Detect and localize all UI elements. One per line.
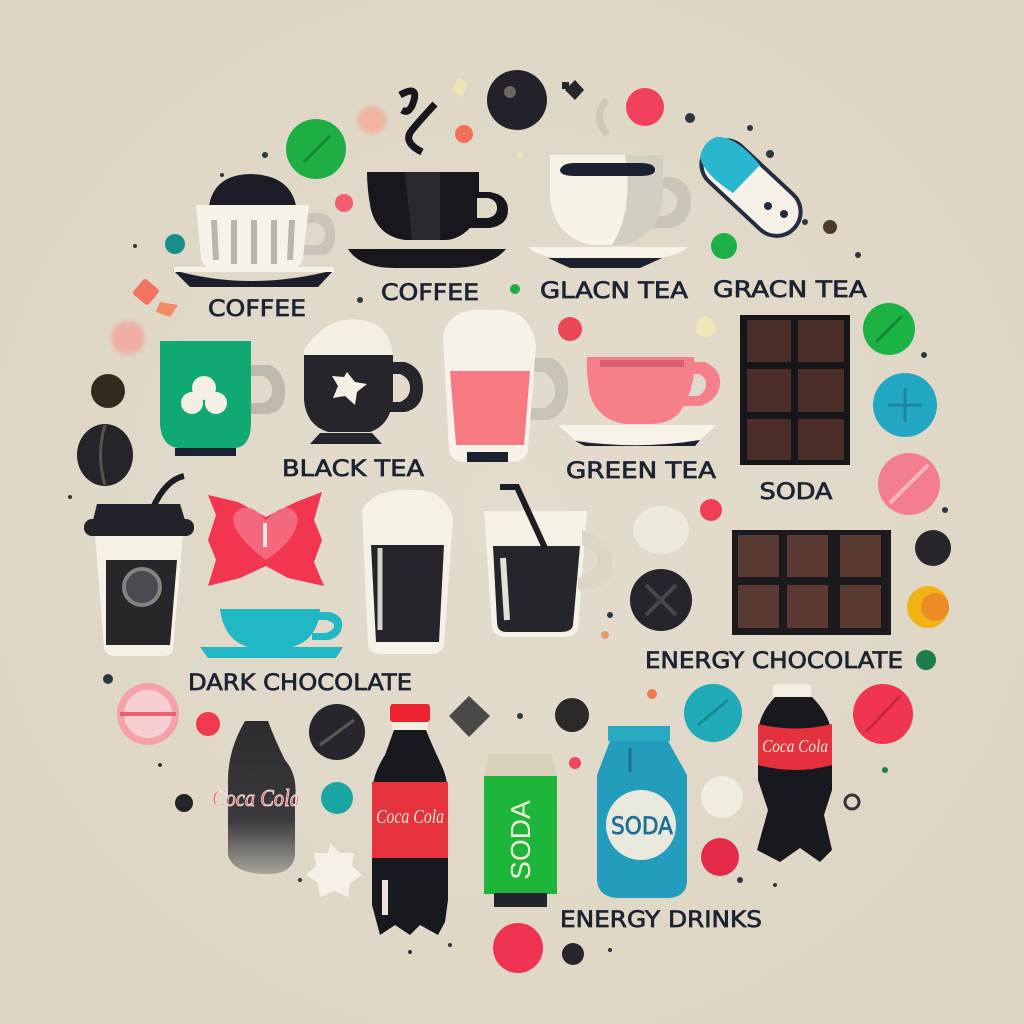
icon: takeaway cup	[84, 476, 194, 656]
icon: dark drink glass with straw	[484, 487, 612, 637]
label: coffee 1: COFFEE	[208, 297, 306, 322]
icon: blue and white capsule	[691, 130, 811, 246]
icon: dark drink glass with foam	[362, 490, 453, 654]
label: soda: SODA	[760, 480, 832, 505]
icon: green mug	[160, 341, 285, 456]
icon: red candy heart	[208, 492, 324, 586]
icon: cola bottle right	[757, 684, 832, 862]
icon: green soda can: SODA	[505, 800, 536, 880]
icon: chocolate bar lower	[732, 530, 891, 635]
label: dark chocolate: DARK CHOCOLATE	[188, 671, 412, 696]
icon: dark mug with foam	[304, 319, 423, 444]
label: coffee 2: COFFEE	[381, 281, 479, 306]
icon: faded cola bottle: Coca Cola	[212, 786, 300, 812]
confetti dots	[68, 113, 948, 954]
label: black tea: BLACK TEA	[282, 457, 424, 482]
icon: blue soda carton: SODA	[611, 812, 674, 840]
icon: chocolate bar upper	[740, 315, 850, 465]
icon: cola bottle right: Coca Cola	[762, 736, 828, 756]
icon: red-label cola bottle	[372, 704, 448, 935]
icon: teal cup on saucer	[200, 609, 343, 658]
icon: red-label cola bottle: Coca Cola	[376, 806, 444, 828]
label: energy drinks: ENERGY DRINKS	[560, 908, 762, 933]
label: energy chocolate: ENERGY CHOCOLATE	[645, 649, 903, 674]
icon: faded cola bottle	[212, 721, 300, 874]
icon: pink latte glass	[443, 310, 568, 462]
icon: white tea cup	[528, 155, 691, 268]
icon: striped coffee cup	[173, 174, 335, 287]
icon: green soda can	[484, 754, 557, 907]
label: glacn tea: GLACN TEA	[540, 279, 688, 304]
label: green tea: GREEN TEA	[566, 459, 716, 484]
icon: black coffee cup	[348, 91, 508, 268]
pills and beans	[77, 70, 951, 973]
icon: blue soda carton	[597, 726, 687, 898]
label: gracn tea: GRACN TEA	[713, 278, 867, 303]
icon: pink tea cup	[558, 357, 720, 446]
